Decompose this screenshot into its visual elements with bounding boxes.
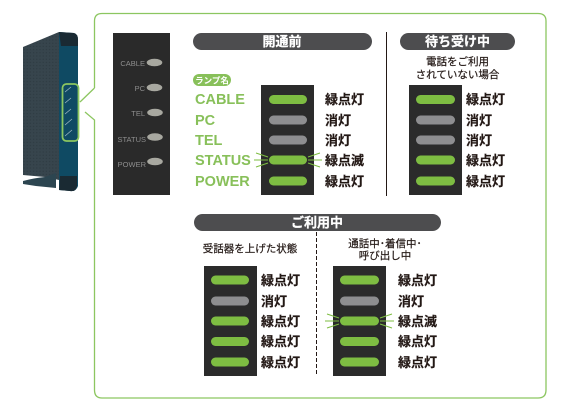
status labels: 待ち受け中 bbox=[466, 92, 505, 189]
status labels: 待ち受け中: 緑点灯 bbox=[466, 153, 505, 168]
caption: 通話中・着信中・呼び出し中 bbox=[348, 237, 422, 262]
dashed divider bbox=[316, 232, 318, 376]
status labels: 開通前: 消灯 bbox=[325, 113, 351, 128]
status panel: 受話器を上げた状態 bbox=[204, 266, 257, 376]
device lamp: CABLE: CABLE bbox=[120, 59, 145, 68]
heading: 開通前 bbox=[193, 33, 372, 50]
status labels: 開通前 bbox=[325, 92, 364, 189]
status labels: 通話中: 緑点灯 bbox=[398, 273, 437, 288]
highlight frame on device bbox=[62, 84, 78, 141]
caption: 受話器を上げた状態: 受話器を上げた状態 bbox=[203, 242, 298, 255]
heading: 待ち受け中: 待ち受け中 bbox=[425, 34, 490, 49]
status labels: 通話中: 緑点灯 bbox=[398, 334, 437, 349]
status labels: 受話器を上げた状態: 緑点灯 bbox=[261, 314, 300, 329]
icon: router device bbox=[23, 32, 78, 191]
blink rays bbox=[254, 153, 322, 167]
status labels: 待ち受け中: 消灯 bbox=[466, 133, 492, 148]
status panel: 開通前 bbox=[254, 85, 322, 195]
device lamp: TEL: TEL bbox=[131, 109, 145, 118]
status panel: 通話中 bbox=[325, 266, 394, 376]
status labels: 開通前: 緑点滅 bbox=[325, 153, 364, 168]
status labels: 開通前: 緑点灯 bbox=[325, 92, 364, 107]
status labels: 開通前: 緑点灯 bbox=[325, 174, 364, 189]
status labels: 待ち受け中: 緑点灯 bbox=[466, 92, 505, 107]
status labels: 開通前: 消灯 bbox=[325, 133, 351, 148]
blink rays bbox=[325, 314, 394, 328]
device lamp: PC: PC bbox=[135, 84, 146, 93]
caption: 通話中・着信中・呼び出し中: 通話中･着信中･ bbox=[348, 237, 422, 250]
device lamp: TEL bbox=[131, 109, 163, 118]
heading: 開通前: 開通前 bbox=[262, 34, 302, 49]
caption: 電話をご利用されていない場合: 電話をご利用 bbox=[426, 55, 489, 68]
status labels: 通話中: 消灯 bbox=[398, 294, 424, 309]
status labels: 受話器を上げた状態: 消灯 bbox=[261, 294, 287, 309]
lamp name labels: TEL bbox=[195, 133, 223, 149]
device lamp: PC bbox=[135, 84, 162, 93]
device lamp: POWER bbox=[118, 158, 163, 169]
lamp name labels: POWER bbox=[195, 174, 250, 190]
status labels: 待ち受け中: 消灯 bbox=[466, 113, 492, 128]
heading: 待ち受け中 bbox=[400, 33, 515, 50]
status labels: 受話器を上げた状態: 緑点灯 bbox=[261, 355, 300, 370]
status labels: 通話中 bbox=[398, 273, 437, 370]
status labels: 受話器を上げた状態: 緑点灯 bbox=[261, 273, 300, 288]
panel: device lamp photo bbox=[113, 33, 170, 195]
status labels: 待ち受け中: 緑点灯 bbox=[466, 174, 505, 189]
caption: 電話をご利用されていない場合 bbox=[416, 55, 500, 81]
lamp name labels: PC bbox=[195, 113, 216, 129]
badge: ランプ名: ランプ名 bbox=[195, 76, 229, 86]
status labels: 受話器を上げた状態 bbox=[261, 273, 300, 370]
panel: green outline callout bbox=[80, 14, 546, 398]
status labels: 通話中: 緑点滅 bbox=[398, 314, 437, 329]
device lamp: STATUS: STATUS bbox=[118, 135, 146, 144]
caption: 通話中・着信中・呼び出し中: 呼び出し中 bbox=[359, 249, 411, 262]
status labels: 受話器を上げた状態: 緑点灯 bbox=[261, 334, 300, 349]
device lamp: STATUS bbox=[118, 133, 163, 144]
lamp name labels: CABLE bbox=[195, 92, 245, 108]
device lamp: POWER: POWER bbox=[118, 160, 147, 169]
heading: ご利用中 bbox=[194, 214, 441, 231]
caption: 電話をご利用されていない場合: されていない場合 bbox=[416, 68, 500, 81]
lamp name labels bbox=[195, 92, 251, 190]
device lamp: CABLE bbox=[120, 59, 162, 68]
divider bbox=[386, 32, 388, 196]
heading: ご利用中: ご利用中 bbox=[291, 215, 343, 230]
status labels: 通話中: 緑点灯 bbox=[398, 355, 437, 370]
status panel: 待ち受け中 bbox=[409, 85, 462, 195]
lamp name labels: STATUS bbox=[195, 153, 251, 169]
